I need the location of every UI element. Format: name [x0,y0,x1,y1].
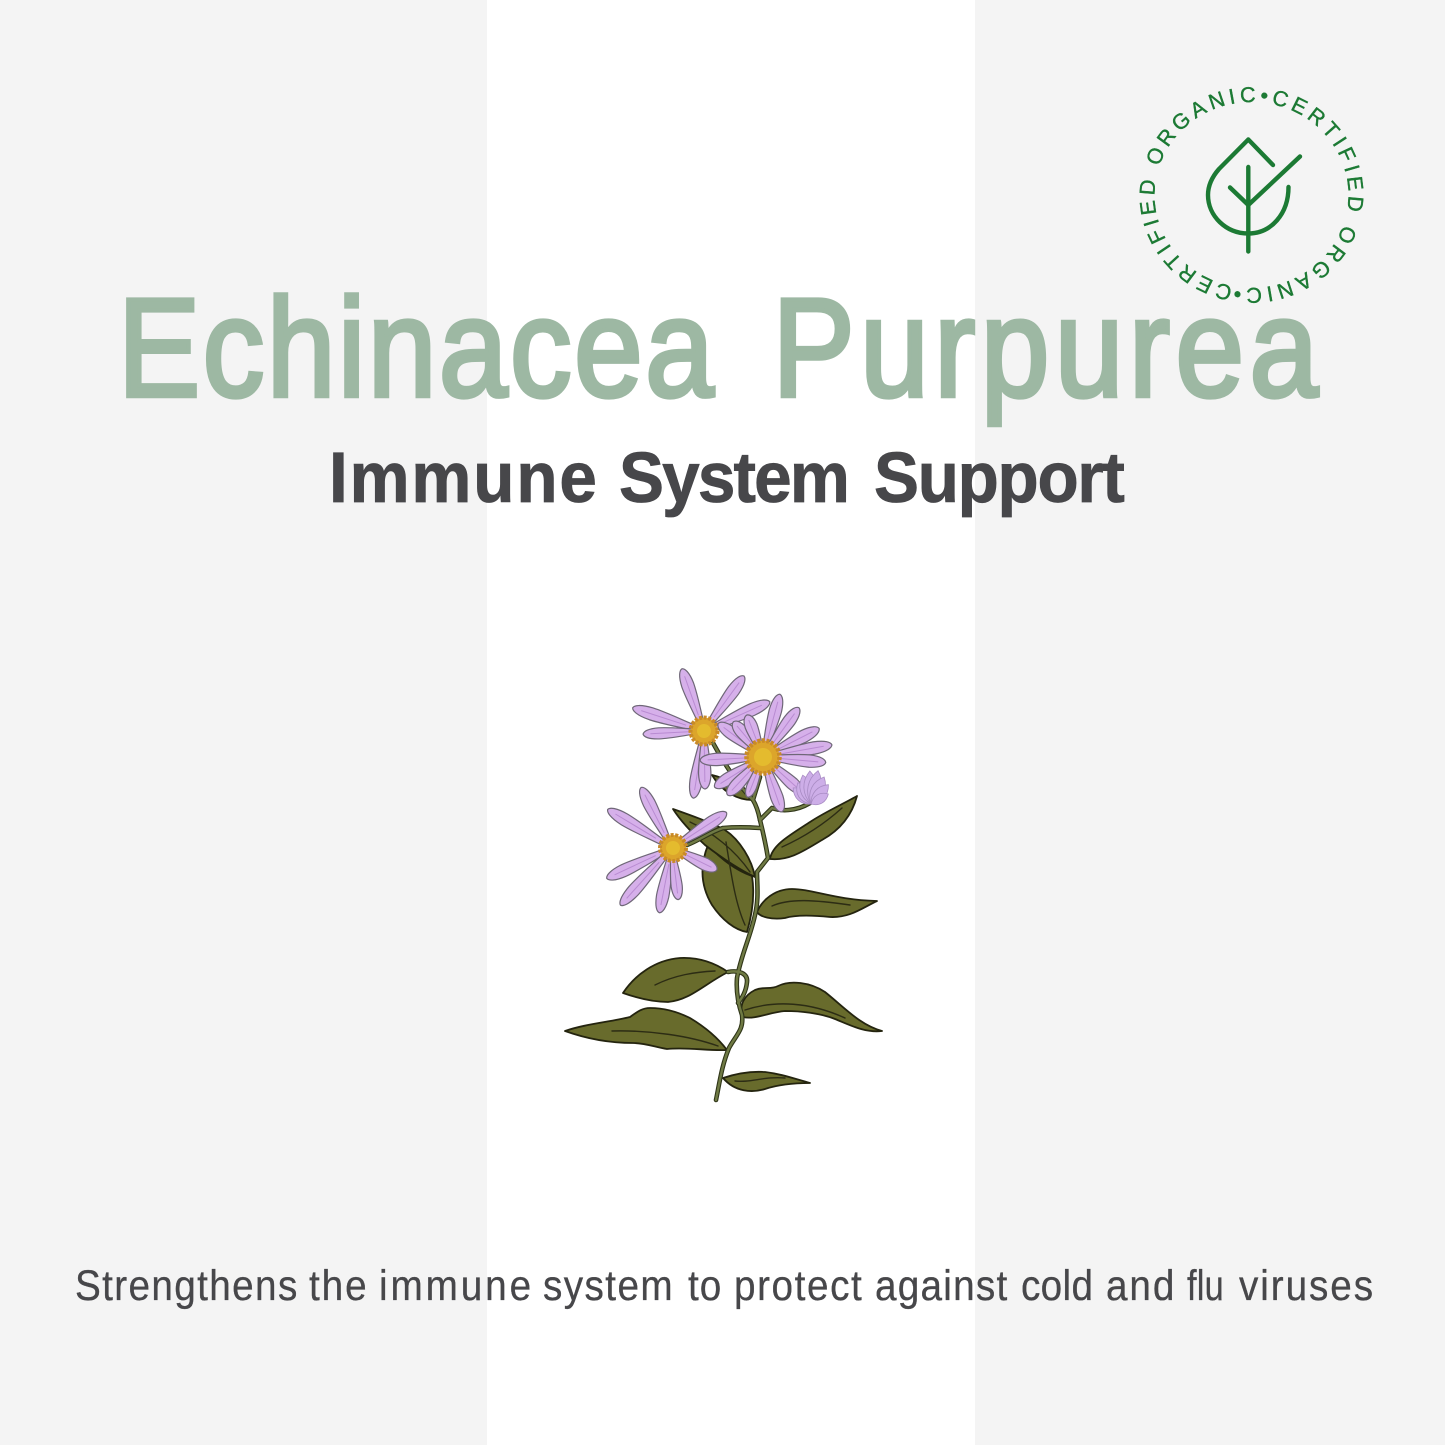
subtitle [329,437,1125,517]
organic certified badge [1139,86,1364,304]
tagline: Strengthens [75,1261,297,1309]
flower: centre [700,693,833,814]
flower: top left [631,667,772,799]
icon: leaf with check mark [1208,140,1300,252]
tagline: cold [1021,1261,1093,1309]
tagline: flu [1187,1262,1224,1310]
tagline: protect [734,1261,862,1309]
title: Echinacea [118,270,714,426]
tagline: the [309,1261,367,1309]
tagline: and [1106,1261,1174,1309]
flower: lower left [604,785,730,914]
leaves [565,775,882,1091]
tagline: viruses [1239,1261,1373,1309]
illustration: echinacea plant [565,667,882,1100]
title [118,270,1319,426]
tagline: against [875,1261,1008,1309]
flower bud [789,769,833,808]
tagline: to [688,1261,721,1309]
tagline: system [543,1261,673,1309]
subtitle: Immune [329,437,597,517]
badge circular text: CERTIFIED ORGANIC•CERTIFIED ORGANIC• [1139,86,1364,304]
subtitle: Support [874,437,1125,517]
title: Purpurea [772,270,1319,426]
tagline: immune [379,1261,531,1309]
stem [687,743,810,1100]
tagline [75,1261,1373,1310]
subtitle: System [619,437,850,517]
